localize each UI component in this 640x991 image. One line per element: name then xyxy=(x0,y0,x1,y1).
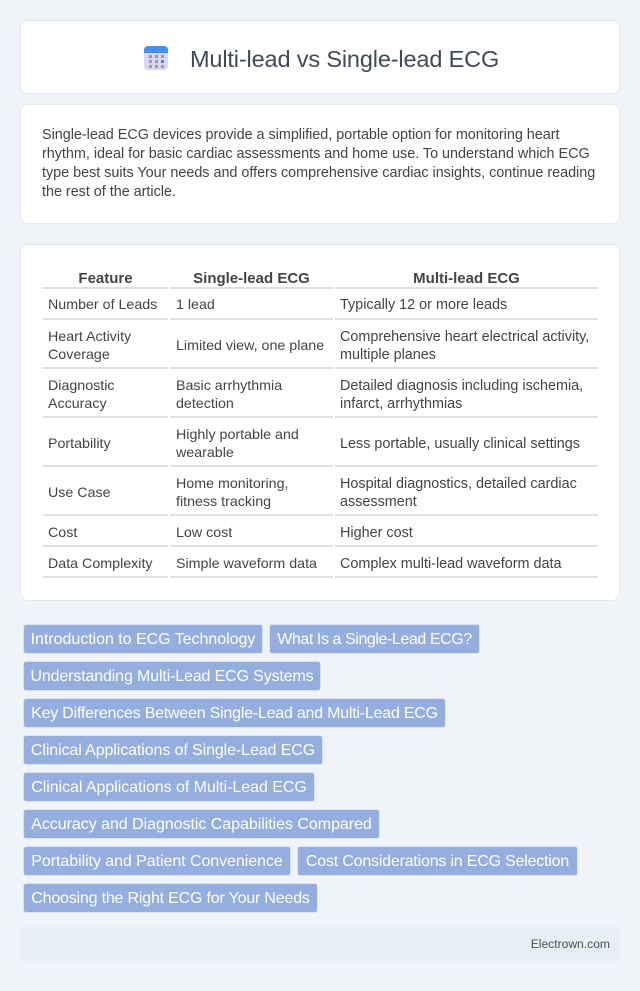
table rows: Accuracy xyxy=(48,396,107,412)
table rows xyxy=(43,287,598,578)
table rows: Home monitoring, xyxy=(176,476,288,492)
table rows: Low cost xyxy=(176,525,232,541)
topic tags: Clinical Applications of Multi-Lead ECG xyxy=(31,779,307,796)
topic tags: Accuracy and Diagnostic Capabilities Compared xyxy=(31,816,372,833)
topic tags: Clinical Applications of Single-Lead ECG xyxy=(31,742,315,759)
table rows: Use Case xyxy=(48,485,111,501)
topic tags: Choosing the Right ECG for Your Needs xyxy=(31,890,310,907)
comparison table panel xyxy=(20,244,620,601)
topic tags: Introduction to ECG Technology xyxy=(31,631,255,648)
title: Multi-lead vs Single-lead ECG xyxy=(190,46,499,72)
table header: Single-lead ECG xyxy=(193,270,310,287)
table rows: Highly portable and xyxy=(176,427,299,443)
table rows: multiple planes xyxy=(340,347,436,363)
table rows: Comprehensive heart electrical activity, xyxy=(340,329,589,345)
table rows: Diagnostic xyxy=(48,378,115,394)
footer credit: Electrown.com xyxy=(531,937,610,951)
table rows: Limited view, one plane xyxy=(176,338,324,354)
table rows: Hospital diagnostics, detailed cardiac xyxy=(340,476,577,492)
table rows: Complex multi-lead waveform data xyxy=(340,556,562,572)
intro text panel: the rest of the article. xyxy=(42,184,176,200)
table header: Multi-lead ECG xyxy=(413,270,520,287)
header card xyxy=(20,20,620,94)
table rows: infarct, arrhythmias xyxy=(340,396,462,412)
topic tags: What Is a Single-Lead ECG? xyxy=(277,631,472,648)
table rows: Less portable, usually clinical settings xyxy=(340,436,580,452)
intro text panel: type best suits Your needs and offers comprehensive cardiac insights, continue reading xyxy=(42,165,595,181)
table rows: Typically 12 or more leads xyxy=(340,297,507,313)
table header: Feature xyxy=(78,270,133,287)
table rows: Detailed diagnosis including ischemia, xyxy=(340,378,583,394)
table rows: wearable xyxy=(176,445,234,461)
intro text panel xyxy=(20,104,620,224)
table rows: Portability xyxy=(48,436,111,452)
table rows: fitness tracking xyxy=(176,494,271,510)
topic tags: Understanding Multi-Lead ECG Systems xyxy=(30,668,314,685)
table rows: Number of Leads xyxy=(48,297,157,313)
topic tags: Cost Considerations in ECG Selection xyxy=(306,853,569,870)
table rows: Basic arrhythmia xyxy=(176,378,282,394)
table rows: Data Complexity xyxy=(48,556,153,572)
intro text panel: Single-lead ECG devices provide a simplified, portable option for monitoring heart xyxy=(42,127,560,143)
table rows: assessment xyxy=(340,494,417,510)
table rows: Heart Activity xyxy=(48,329,131,345)
footer xyxy=(20,927,620,961)
topic tags: Portability and Patient Convenience xyxy=(31,853,283,870)
table rows: Higher cost xyxy=(340,525,413,541)
table rows: Simple waveform data xyxy=(176,556,317,572)
icon: calendar xyxy=(144,46,168,70)
topic tags xyxy=(23,624,578,913)
table rows: Cost xyxy=(48,525,77,541)
table header xyxy=(78,270,520,287)
table rows: Coverage xyxy=(48,347,110,363)
table rows: detection xyxy=(176,396,234,412)
intro text panel: rhythm, ideal for basic cardiac assessments and home use. To understand which ECG xyxy=(42,146,590,162)
table rows: 1 lead xyxy=(176,297,215,313)
topic tags: Key Differences Between Single-Lead and Multi-Lead ECG xyxy=(31,705,438,722)
